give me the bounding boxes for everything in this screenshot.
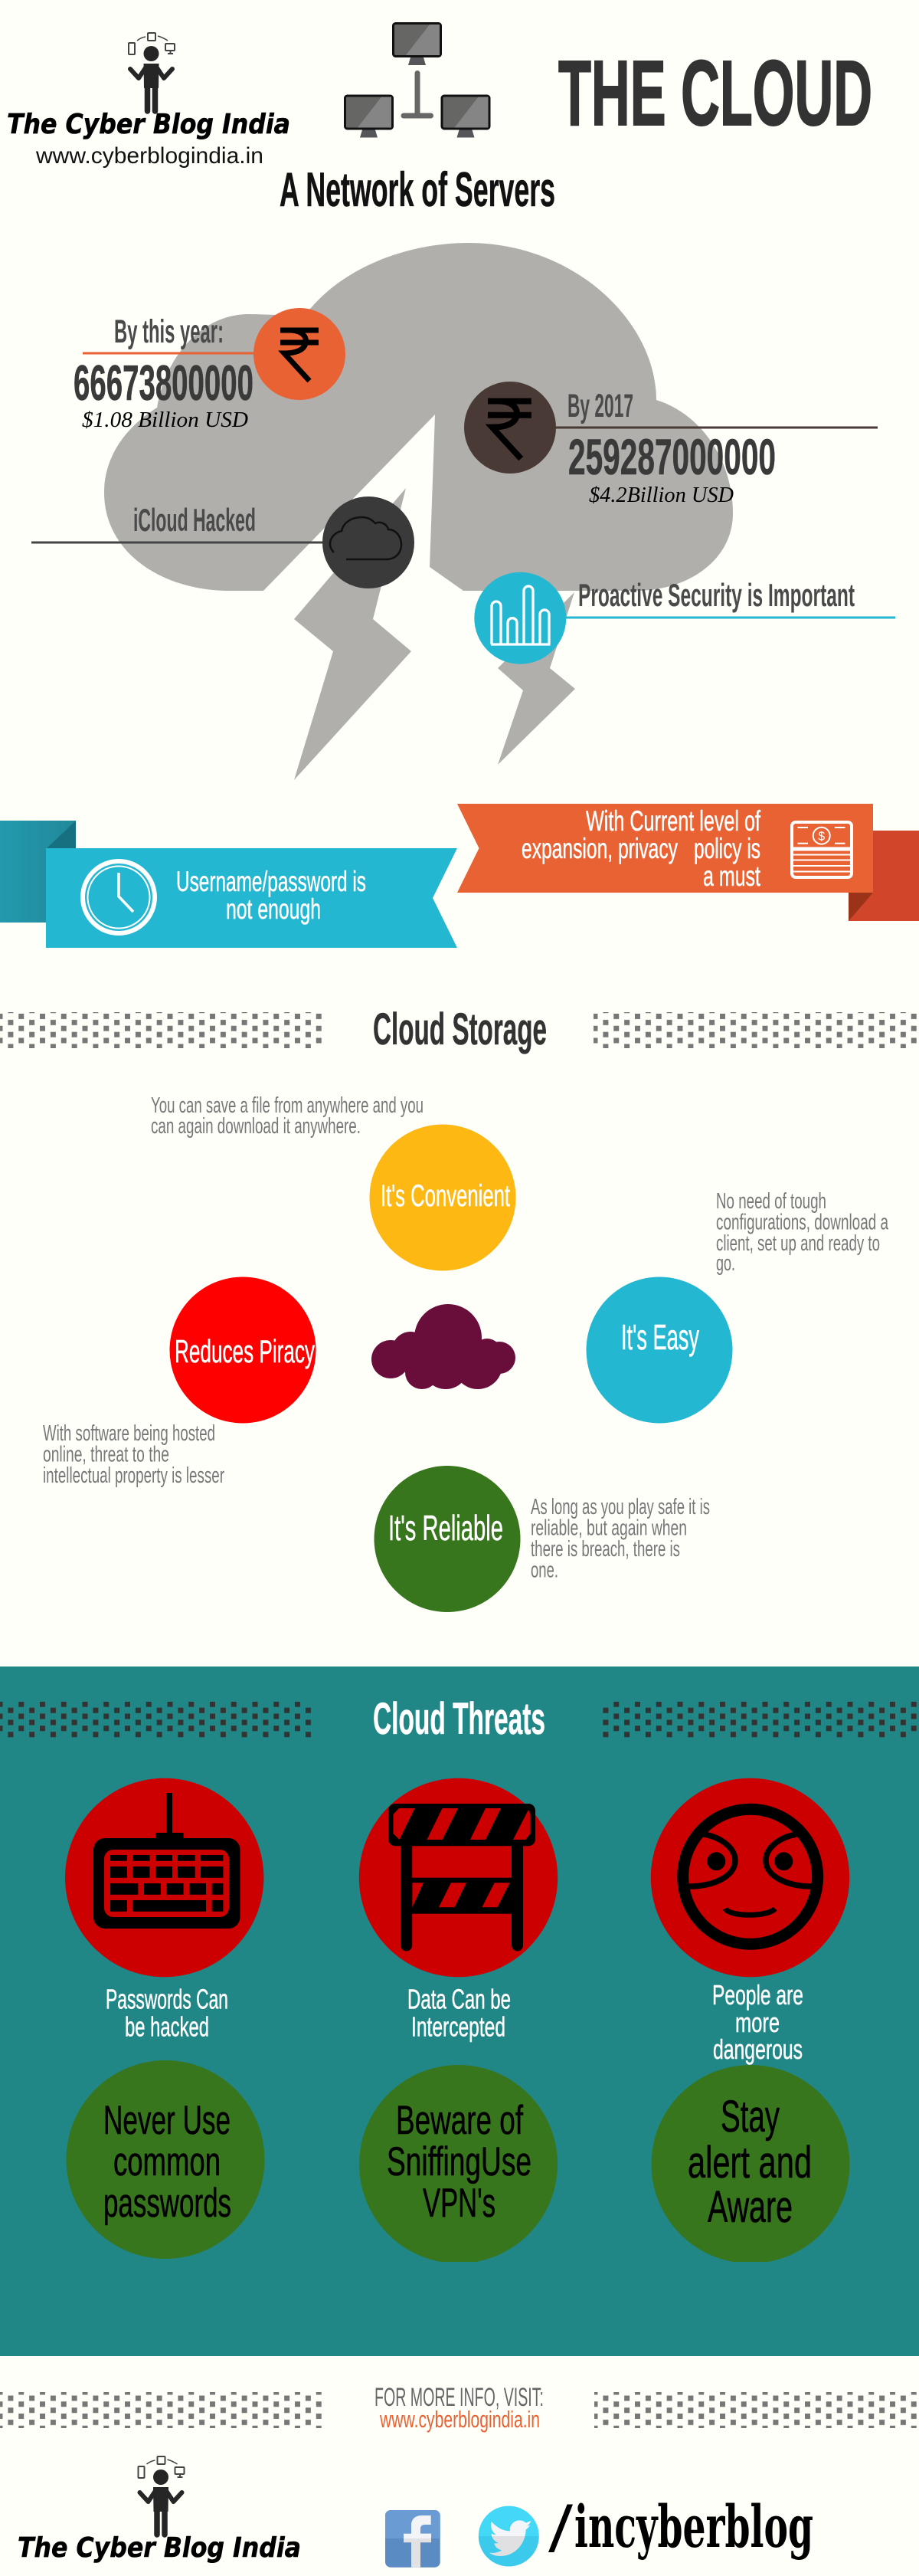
tip: vpn: Beware of: [396, 2098, 523, 2143]
banner: privacy policy: policy is: [694, 833, 760, 864]
heading: cloud storage: Cloud Storage: [373, 1005, 547, 1054]
note: convenient: You can save a file from anywhere and you: [151, 1093, 424, 1118]
logo: The Cyber Blog India: www.cyberblogindia.in: [35, 143, 263, 169]
note: piracy: [43, 1421, 224, 1488]
icon: keyboard: [65, 1778, 263, 1977]
logo: footer: The Cyber Blog India: [18, 2532, 301, 2564]
callout: iCloud hacked: [31, 497, 414, 588]
tip: passwords: passwords: [103, 2181, 231, 2226]
callout: by this year: [74, 308, 345, 432]
text: for more info: [374, 2383, 544, 2433]
heading: cloud threats: Cloud Threats: [373, 1694, 545, 1744]
lightning bolt left: [294, 488, 411, 780]
label: passwords: [106, 1983, 228, 2043]
tip: stay alert: Aware: [708, 2182, 793, 2232]
note: easy: go.: [716, 1251, 735, 1276]
tip: stay alert: Stay: [721, 2092, 780, 2142]
text: social handle: /: [548, 2492, 573, 2561]
callout: by this year: By this year:: [114, 313, 224, 350]
icon: network of monitors: [345, 23, 489, 138]
callout: by 2017: 259287000000: [568, 428, 776, 485]
callout: proactive security: [474, 572, 895, 664]
icon: clock: [83, 861, 155, 933]
note: piracy: intellectual property is lesser: [43, 1463, 224, 1488]
subtitle: A Network of Servers: [280, 163, 555, 217]
panel: cloud threats: [0, 1667, 919, 2356]
panel: cloud storage: [0, 1005, 919, 1612]
banner: username and password: [0, 821, 457, 948]
label: people: [712, 1979, 803, 2065]
panel: footer: [0, 2383, 919, 2568]
note: convenient: can again download it anywhere.: [151, 1114, 361, 1139]
storm cloud: [104, 243, 733, 591]
note: reliable: one.: [531, 1558, 558, 1583]
banner: username and password: not enough: [226, 893, 321, 925]
text: for more info: www.cyberblogindia.in: [379, 2406, 540, 2433]
lightning bolt right: [498, 592, 575, 765]
banner: privacy policy: expansion, privacy: [522, 833, 678, 864]
tip: passwords: common: [113, 2139, 221, 2184]
circle: convenient: [369, 1125, 516, 1270]
logo: The Cyber Blog India: The Cyber Blog India: [7, 109, 290, 140]
icon: road barrier: [359, 1778, 558, 1977]
label: data: Intercepted: [411, 2011, 505, 2043]
tip: passwords: [66, 2060, 265, 2259]
text: social handle: [548, 2492, 813, 2561]
icon: money stack: [792, 822, 852, 877]
note: piracy: With software being hosted: [43, 1421, 215, 1446]
callout: by this year: 66673800000: [74, 355, 253, 411]
icon: twitter: [479, 2506, 539, 2567]
tip: vpn: SniffingUse: [387, 2139, 531, 2184]
circle: reliable: [374, 1466, 521, 1612]
label: people: more: [735, 2007, 780, 2038]
label: data: [407, 1983, 511, 2043]
banner: privacy policy: a must: [703, 860, 760, 892]
label: people: People are: [712, 1979, 803, 2011]
banner: privacy policy: [457, 804, 919, 921]
note: reliable: reliable, but again when: [531, 1516, 687, 1540]
callout: iCloud hacked: iCloud Hacked: [133, 502, 256, 538]
tip: passwords: Never Use: [103, 2098, 231, 2143]
callout: by this year: $1.08 Billion USD: [82, 408, 248, 432]
note: reliable: As long as you play safe it is: [531, 1495, 710, 1519]
label: data: Data Can be: [407, 1983, 511, 2015]
note: reliable: [531, 1495, 710, 1583]
label: people: dangerous: [713, 2034, 803, 2065]
circle: reliable: It's Reliable: [388, 1508, 503, 1548]
banner: username and password: Username/password is: [176, 866, 366, 897]
note: easy: No need of tough: [716, 1189, 826, 1214]
icon: angry face: [651, 1778, 849, 1977]
callout: by 2017: By 2017: [567, 388, 633, 424]
note: easy: [716, 1189, 889, 1276]
callout: by 2017: [464, 382, 878, 507]
note: convenient: [151, 1093, 424, 1139]
panel: header: [7, 23, 872, 217]
logo: footer: [18, 2456, 301, 2564]
logo: The Cyber Blog India: [7, 33, 290, 169]
tip: vpn: [359, 2065, 558, 2262]
note: reliable: there is breach, there is: [531, 1537, 680, 1562]
panel: cloud graphic: [31, 243, 895, 780]
circle: reduces piracy: [170, 1277, 316, 1424]
label: passwords: be hacked: [125, 2011, 209, 2043]
icon: purple cloud: [371, 1304, 515, 1389]
note: piracy: online, threat to the: [43, 1442, 169, 1467]
circle: easy: It's Easy: [621, 1317, 699, 1357]
tip: vpn: VPN's: [423, 2181, 495, 2226]
text: for more info: FOR MORE INFO, VISIT:: [374, 2383, 544, 2412]
label: passwords: Passwords Can: [106, 1983, 228, 2015]
circle: convenient: It's Convenient: [381, 1179, 510, 1213]
circle: easy: [587, 1277, 732, 1424]
icon: money stack: $: [818, 831, 825, 843]
banner: privacy policy: With Current level of: [586, 805, 760, 837]
tip: stay alert: alert and: [688, 2138, 812, 2188]
tip: stay alert: [651, 2065, 850, 2262]
callout: by 2017: $4.2Billion USD: [589, 483, 734, 507]
circle: reduces piracy: Reduces Piracy: [175, 1333, 315, 1369]
icon: facebook: [385, 2510, 440, 2568]
